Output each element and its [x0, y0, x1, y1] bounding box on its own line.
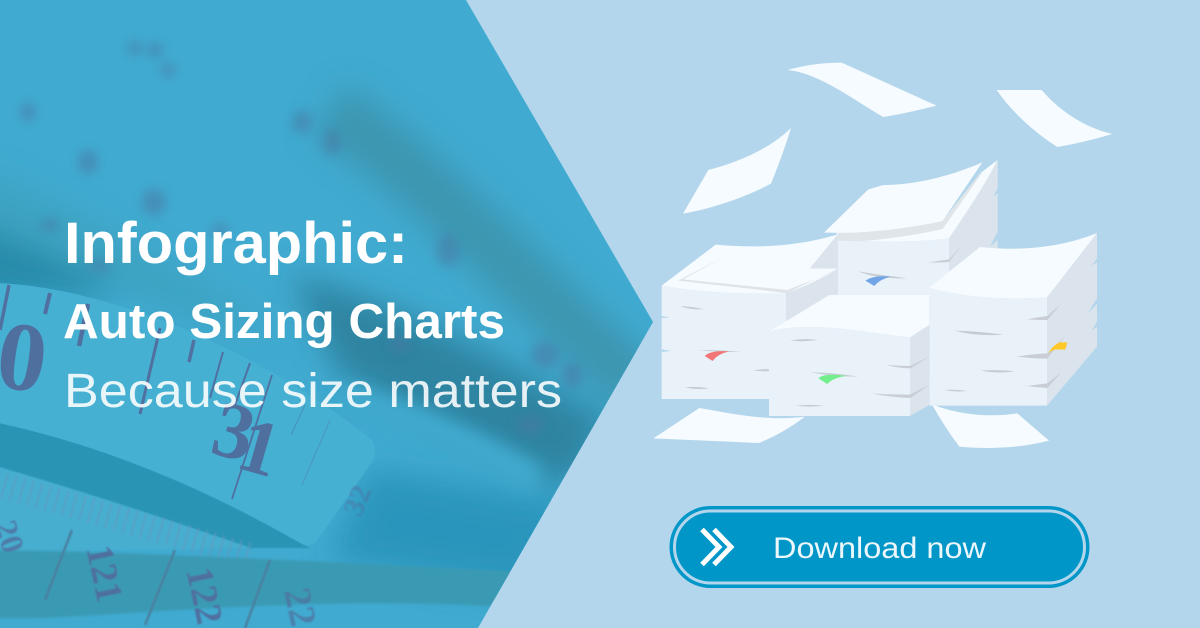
blurred tape markings: [20, 41, 582, 435]
dark gap between tape strips: [0, 420, 310, 548]
title: Infographic: Infographic:: [64, 211, 408, 276]
tape: tick marks and numerals: 32: [337, 480, 378, 521]
panel: tape measure photo with blue overlay: [0, 0, 660, 628]
right paper stack with yellow tab: [929, 233, 1097, 406]
heading: Auto Sizing Charts: Auto Sizing Charts: [63, 295, 505, 349]
tape: tick marks and numerals: [0, 285, 378, 521]
tape: lower strip with dense ticks: [0, 466, 250, 556]
icon: paper stacks illustration: [653, 63, 1112, 448]
tape: lower tape numerals and ticks: 122: [178, 563, 231, 628]
back paper stack with blue tab: [824, 160, 998, 297]
tape: tick marks and numerals: 3: [204, 384, 264, 480]
green tab: [818, 375, 847, 384]
front paper stack with green tab: [769, 295, 940, 416]
button: Download now: [670, 506, 1090, 588]
lighter blurred band: [340, 395, 535, 480]
button label: Download now: [773, 532, 986, 565]
tape: lower tape numerals and ticks: 121: [78, 541, 131, 606]
icon: double chevron arrow: [702, 530, 731, 564]
blue tab: [865, 276, 891, 286]
left paper stack with red tab: [662, 234, 838, 399]
red tab: [705, 351, 729, 361]
tape: tick marks and numerals: 1: [229, 400, 290, 494]
tape: main curved strip: [0, 283, 375, 546]
subheading: Because size matters: Because size matters: [64, 365, 562, 418]
flying sheets of paper: [653, 63, 1112, 448]
yellow tab: [1048, 342, 1067, 353]
tape: blurred teal strip: [0, 550, 520, 618]
tape: lower tape numerals and ticks: [0, 516, 324, 628]
